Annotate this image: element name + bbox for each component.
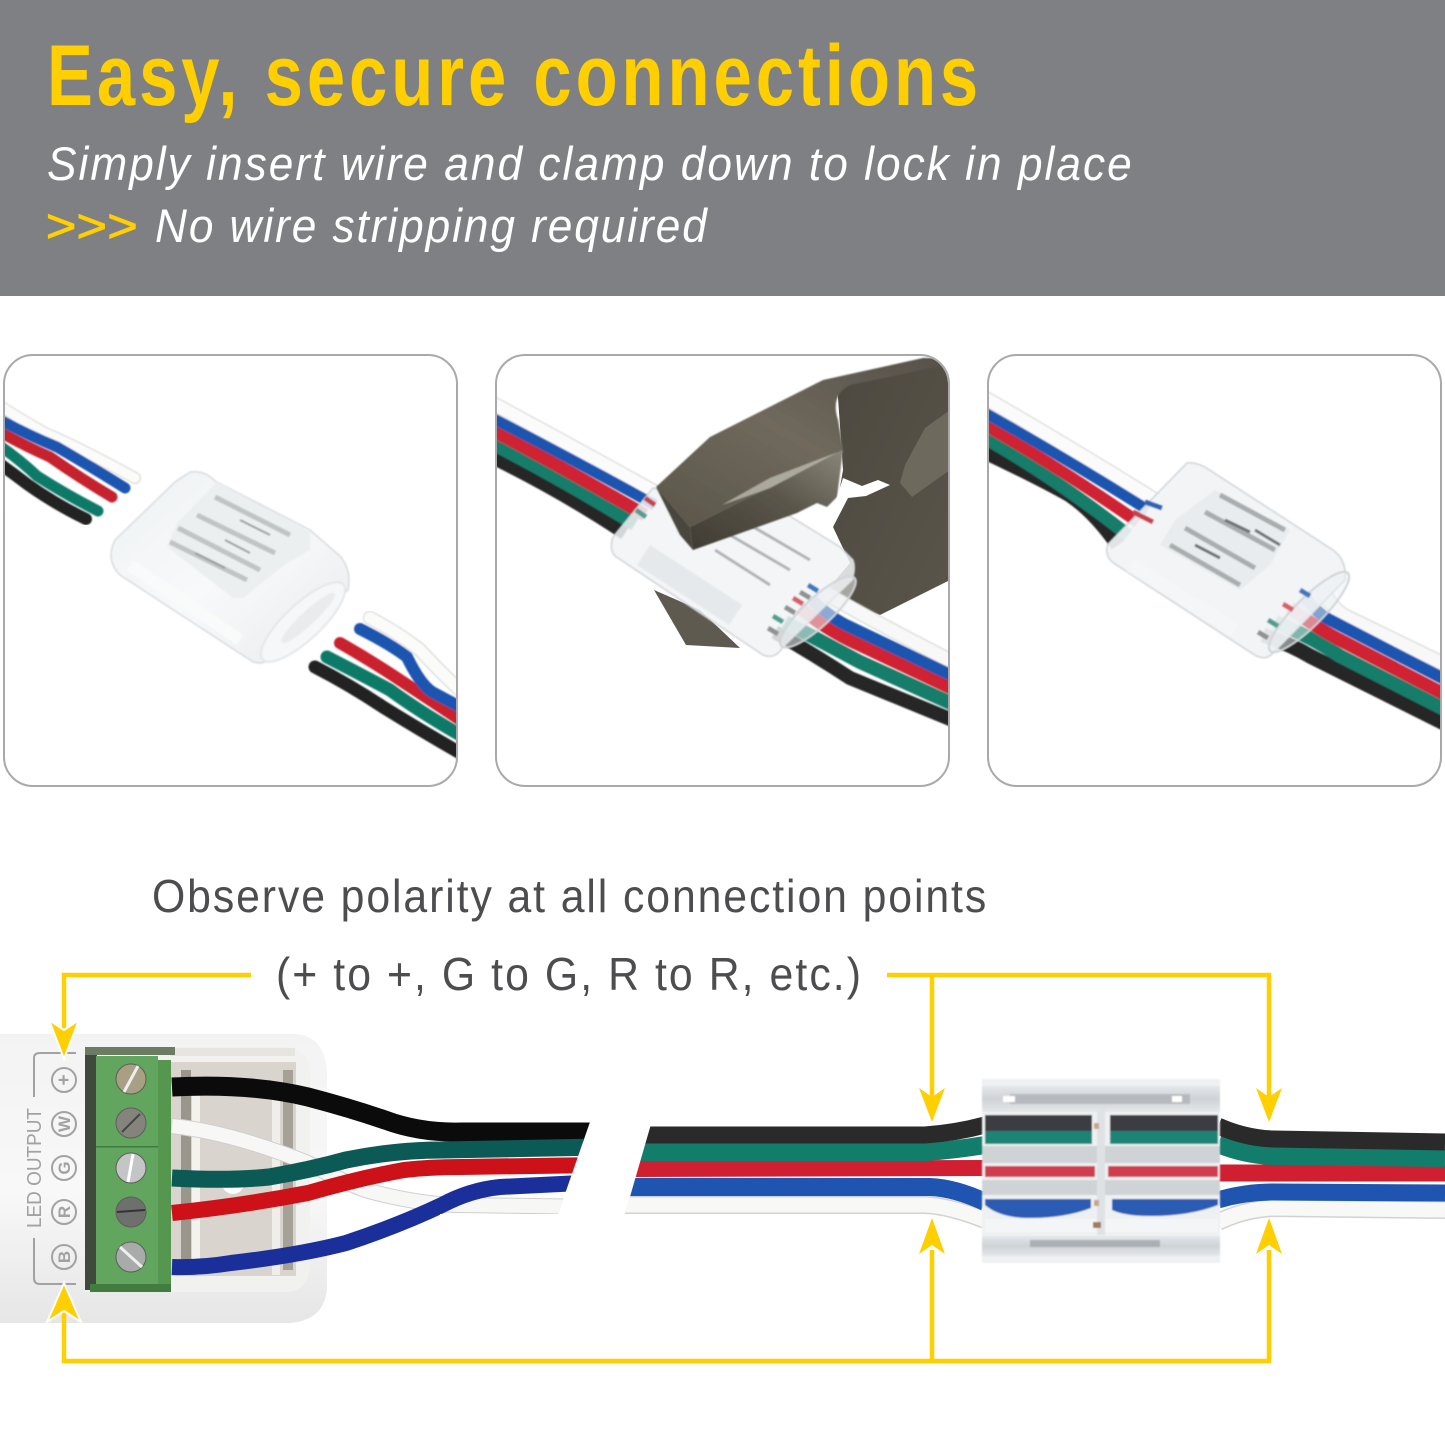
- connector front view: [982, 1079, 1220, 1263]
- left wire run: [620, 1125, 985, 1220]
- title: Easy, secure connections: [47, 28, 978, 124]
- arrowheads: [47, 1020, 1282, 1322]
- panel: connected: [985, 355, 1445, 786]
- wires upper left: [985, 398, 1155, 545]
- pliers lower jaw: [654, 590, 740, 648]
- LED output text: R: [55, 1206, 74, 1218]
- housing: [0, 1034, 327, 1323]
- LED output text: LED OUTPUT: [24, 1108, 46, 1228]
- LED output text: G: [55, 1161, 74, 1175]
- screws: [116, 1064, 146, 1272]
- panel: insert wires: [0, 355, 462, 786]
- subtitle line 2: >>>: [45, 199, 137, 252]
- pliers rear jaw: [823, 356, 950, 615]
- panel: clamp with pliers: [490, 355, 955, 786]
- controller terminal block: [0, 1034, 600, 1323]
- LED output text: +: [54, 1074, 75, 1086]
- controller wires: [172, 1086, 600, 1267]
- terminal cavity: [85, 1047, 310, 1292]
- right wire run: [1218, 1126, 1445, 1222]
- polarity text line 2: (+ to +, G to G, R to R, etc.): [276, 950, 861, 1000]
- connector in pliers: [611, 488, 864, 656]
- LED output labels: [34, 1053, 76, 1284]
- LED output text: B: [55, 1251, 74, 1263]
- header banner: [0, 0, 1445, 296]
- LED output text: [24, 1074, 75, 1263]
- pliers right arm highlight: [900, 410, 950, 497]
- wires upper left: [490, 402, 660, 533]
- pliers top jaw: [656, 358, 950, 550]
- green terminal: [90, 1056, 171, 1292]
- subtitle line 1: Simply insert wire and clamp down to lock in place: [47, 138, 1132, 190]
- stripped wires upper left: [0, 406, 135, 519]
- polarity text line 1: Observe polarity at all connection points: [152, 872, 986, 922]
- wires lower right: [775, 592, 955, 721]
- strip wires to connector: [620, 1079, 1445, 1263]
- polarity arrows: [47, 975, 1282, 1361]
- LED output text: W: [55, 1115, 74, 1132]
- wires lower right: [1263, 592, 1445, 725]
- pliers gap: [833, 478, 890, 527]
- connector closed: [1107, 463, 1358, 661]
- stripped wires lower right: [315, 618, 462, 754]
- connector open: [111, 472, 356, 673]
- subtitle line 2: No wire stripping required: [155, 200, 708, 252]
